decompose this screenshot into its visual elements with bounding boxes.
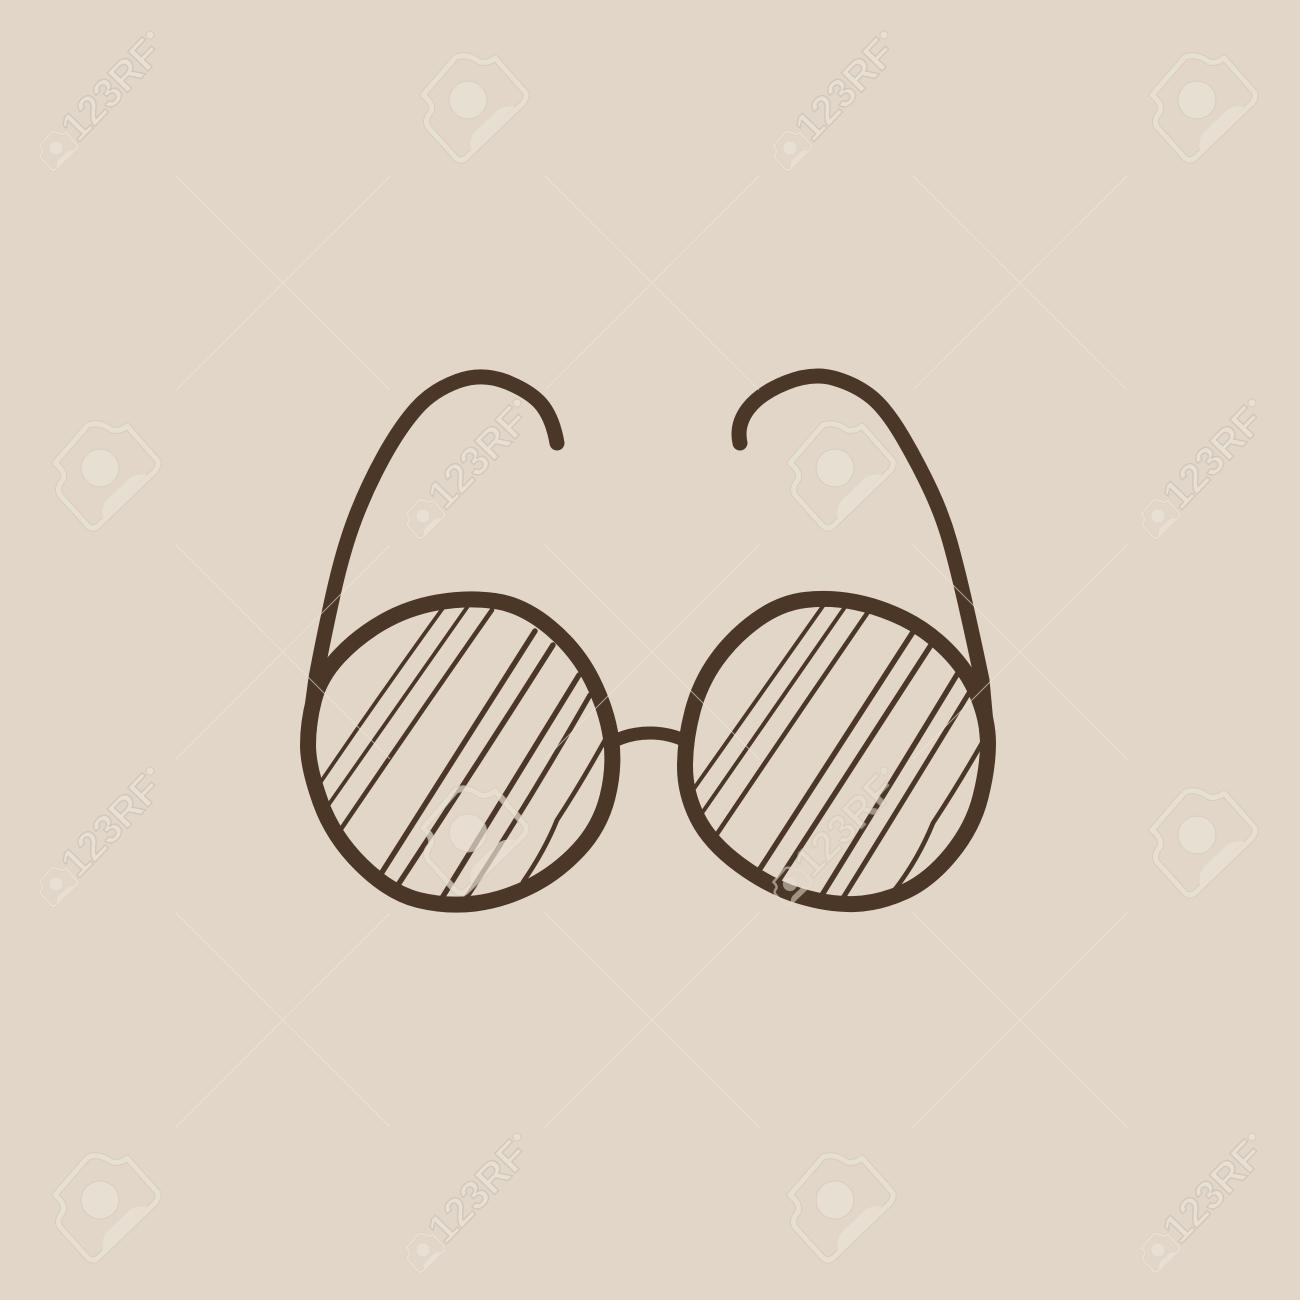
icon: round glasses: [308, 376, 988, 905]
left lens rim: [308, 599, 612, 905]
watermark: 123RF bottom row right: 123RF: [1153, 1131, 1272, 1252]
watermark: 123RF bottom row left: 123RF: [418, 1131, 537, 1252]
faint diagonal watermark crosses: [176, 176, 1127, 1127]
watermark: 123RF third row right: 123RF: [785, 765, 904, 886]
watermark: 123RF second row left: 123RF: [418, 397, 537, 518]
bridge: [612, 733, 688, 742]
watermark: 123RF top row left: 123RF: [51, 29, 170, 150]
right temple arm: [739, 376, 988, 745]
watermark: 123RF third row left: 123RF: [51, 765, 170, 886]
right lens hatching: [693, 606, 982, 898]
right lens rim: [685, 599, 988, 904]
left lens hatching: [320, 606, 605, 900]
left temple arm: [309, 377, 557, 730]
watermark: 123RF second row right: 123RF: [1153, 397, 1272, 518]
watermark: 123RF top row right: 123RF: [785, 29, 904, 150]
